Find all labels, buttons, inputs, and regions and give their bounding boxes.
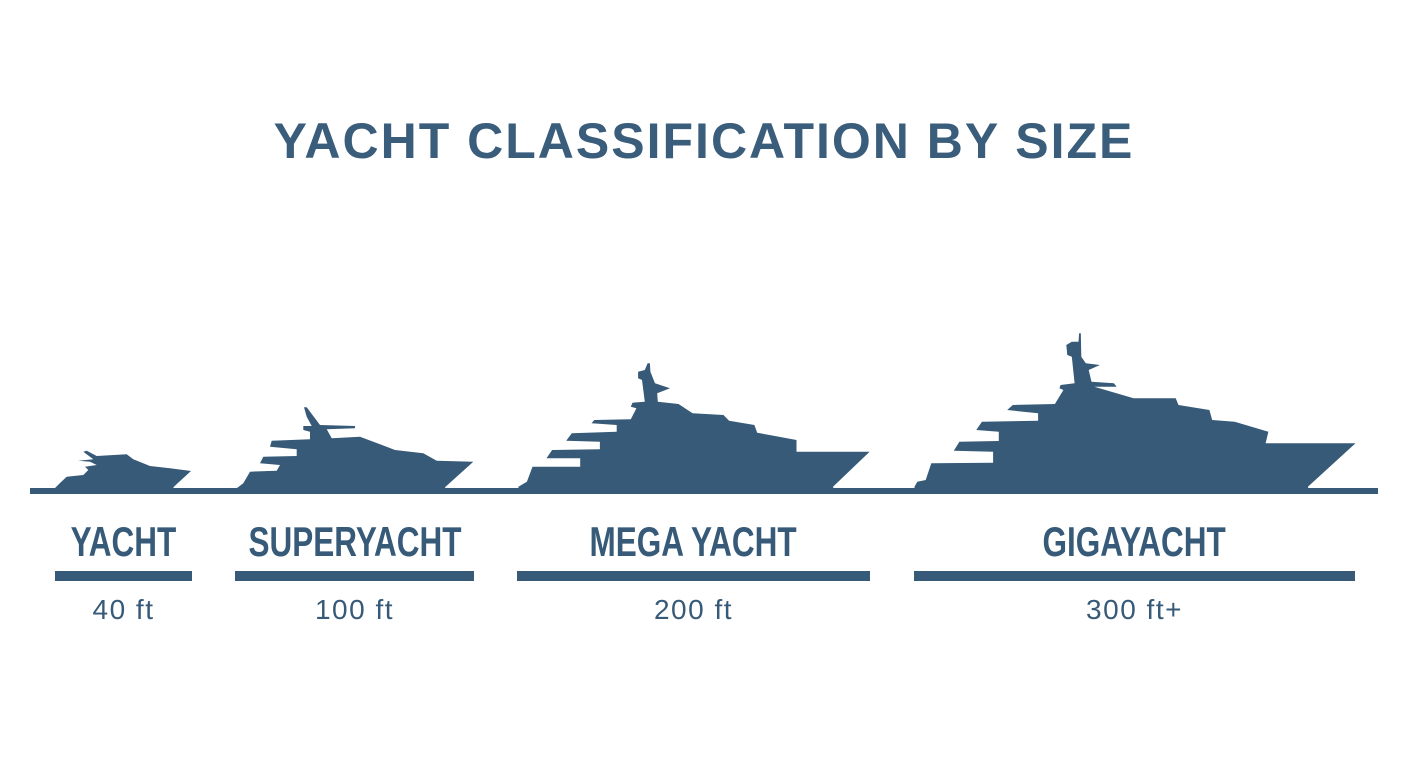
bar: gigayacht xyxy=(914,571,1355,581)
icon: superyacht xyxy=(237,407,473,490)
icon: mega yacht xyxy=(518,363,870,490)
label: superyacht: SUPERYACHT xyxy=(248,518,461,565)
label: yacht: YACHT xyxy=(71,518,176,565)
size: 200 ft: 200 ft xyxy=(654,594,733,625)
bar: mega yacht xyxy=(517,571,870,581)
bar: yacht xyxy=(55,571,192,581)
title: YACHT CLASSIFICATION BY SIZE xyxy=(274,113,1134,169)
size: 40 ft: 40 ft xyxy=(92,594,154,625)
label: mega yacht: MEGA YACHT xyxy=(590,518,797,565)
size: 300 ft+: 300 ft+ xyxy=(1086,594,1183,625)
icon: gigayacht xyxy=(914,333,1356,490)
bar: superyacht xyxy=(235,571,474,581)
icon: yacht xyxy=(55,451,191,490)
waterline xyxy=(30,488,1378,494)
label: gigayacht: GIGAYACHT xyxy=(1043,518,1226,565)
size: 100 ft: 100 ft xyxy=(315,594,394,625)
